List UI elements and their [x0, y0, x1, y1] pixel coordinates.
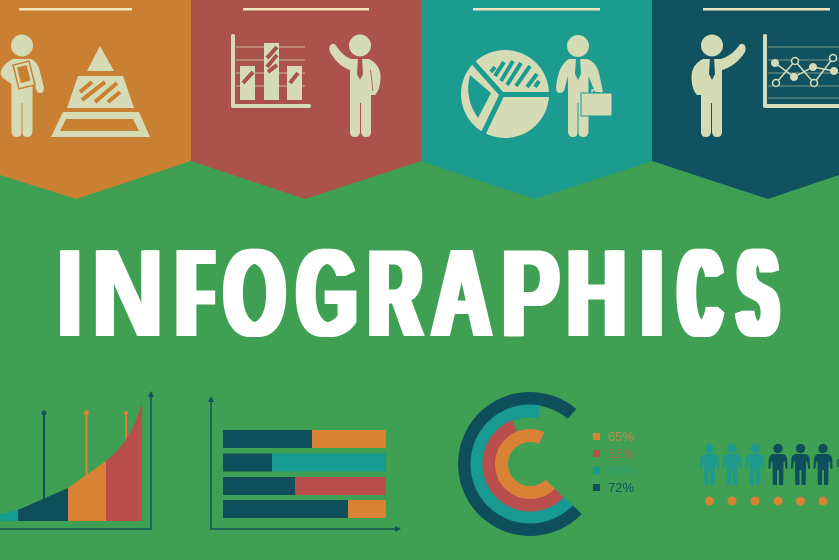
icon: pie chart — [461, 50, 550, 138]
chart: stacked horizontal bars — [208, 396, 401, 532]
legend: 51% — [608, 446, 634, 461]
legend: 65% — [608, 429, 634, 444]
title: H — [567, 225, 626, 363]
title: G — [297, 225, 357, 363]
pictogram: orange dots — [705, 496, 828, 506]
icon: person holding tablet — [1, 34, 44, 137]
title: O — [224, 225, 285, 363]
title — [52, 225, 780, 363]
title: S — [739, 225, 776, 363]
panel: teal banner with pie chart — [421, 0, 652, 199]
icon: bar chart — [233, 36, 309, 106]
panel: orange banner with pyramid — [0, 0, 191, 199]
icon: pyramid — [51, 46, 150, 137]
chart: area growth curve — [0, 391, 154, 529]
title: N — [92, 225, 164, 363]
title: I — [52, 225, 87, 363]
pictogram: people row — [700, 444, 839, 485]
icon: person with briefcase — [556, 35, 612, 137]
legend: 72% — [608, 480, 634, 495]
panel: red banner with bar chart — [191, 0, 421, 199]
title: A — [432, 225, 491, 363]
icon: person pointing right — [691, 34, 746, 137]
title: F — [179, 225, 211, 363]
icon: person pointing left — [329, 34, 381, 137]
icon: line chart — [765, 36, 839, 106]
title: I — [635, 225, 669, 363]
title: P — [502, 225, 559, 363]
chart: concentric radial arcs — [465, 398, 577, 529]
legend: 68% — [608, 463, 634, 478]
legend — [593, 429, 634, 495]
title: R — [369, 225, 422, 363]
panel: navy banner with line chart — [652, 0, 839, 199]
title: C — [680, 225, 721, 363]
